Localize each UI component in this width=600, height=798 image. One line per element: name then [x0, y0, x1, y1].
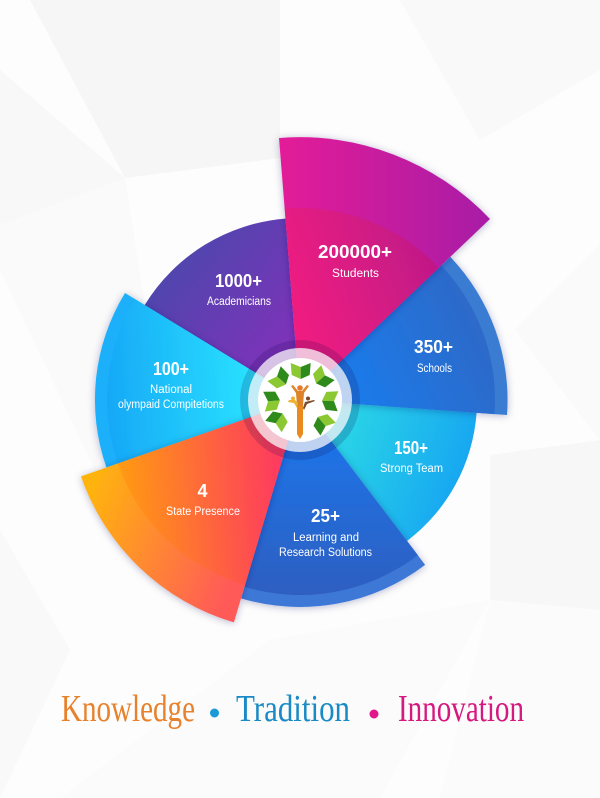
- stat: learning and research solutions: Research Solutions: [279, 547, 372, 559]
- stat: strong team: [380, 438, 443, 475]
- segment: national olympiad competitions: [95, 293, 300, 468]
- stat: national olympiad competitions: 100+: [153, 359, 189, 379]
- stat: academicians: Academicians: [207, 296, 271, 308]
- stat: national olympiad competitions: olympaid Compitetions: [118, 399, 224, 411]
- stat: state presence: [166, 481, 240, 518]
- tagline: Tradition: [236, 688, 350, 730]
- stat: learning and research solutions: 25+: [311, 506, 340, 526]
- icon: pencil tree with people: [288, 385, 315, 439]
- segment: strong team: [300, 400, 477, 541]
- stat: schools: [414, 337, 453, 375]
- stat: students: 200000+: [318, 242, 392, 262]
- stat: state presence: State Presence: [166, 506, 240, 518]
- segment: schools: [300, 257, 508, 415]
- stat: learning and research solutions: Learning and: [293, 532, 359, 544]
- segment: academicians: [145, 219, 300, 400]
- stat: schools: Schools: [417, 363, 452, 375]
- tagline: Innovation: [398, 688, 524, 730]
- wheel of segments: [81, 137, 508, 622]
- stat: academicians: 1000+: [215, 271, 262, 291]
- stat: strong team: 150+: [394, 438, 428, 458]
- segment: learning and research solutions: [241, 400, 425, 607]
- segment: students: [279, 137, 490, 400]
- stat: national olympiad competitions: National: [150, 384, 192, 396]
- stat: schools: 350+: [414, 337, 453, 357]
- stat: state presence: 4: [197, 481, 208, 501]
- icon: ring of green books: [263, 363, 338, 436]
- stat: national olympiad competitions: [118, 359, 224, 411]
- center logo: [240, 340, 360, 460]
- stat: students: [318, 242, 392, 280]
- tagline: Knowledge: [61, 688, 195, 730]
- segment: state presence: [81, 400, 300, 622]
- stat: strong team: Strong Team: [380, 463, 443, 475]
- stat: students: Students: [332, 268, 379, 280]
- stat: academicians: [207, 271, 271, 308]
- tagline: [61, 688, 524, 730]
- stat: learning and research solutions: [279, 506, 372, 559]
